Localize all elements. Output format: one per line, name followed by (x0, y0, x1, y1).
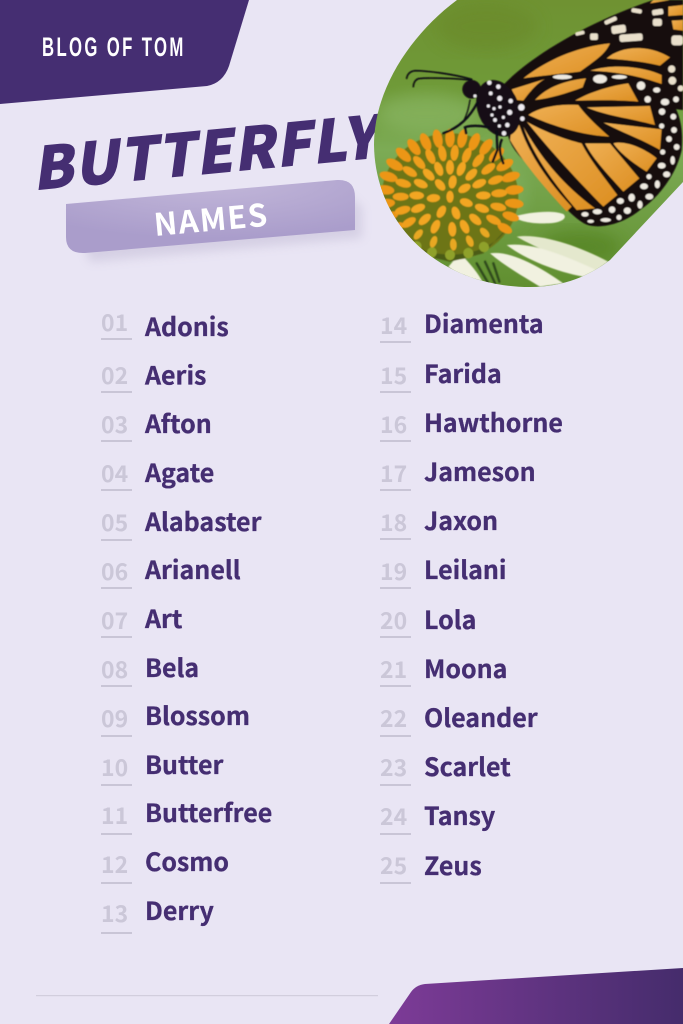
item 07: 07 (101, 602, 128, 636)
item 17: 17 (380, 455, 407, 489)
item 03: 03 (101, 406, 128, 440)
item 15: 15 (380, 357, 407, 391)
item 23: Scarlet (424, 748, 511, 784)
item 10: Butter (145, 746, 223, 782)
flower stem shadow (477, 262, 499, 283)
flower cone (375, 129, 524, 262)
item 13: 13 (101, 895, 128, 929)
item 10 (101, 746, 223, 786)
item 22: Oleander (424, 699, 538, 735)
item 12 (101, 843, 229, 884)
item 24 (380, 797, 496, 835)
item 18: 18 (380, 504, 407, 538)
item 25: Zeus (424, 847, 482, 883)
item 02: Aeris (144, 356, 206, 392)
item 23 (380, 748, 511, 786)
item 24: Tansy (424, 797, 496, 833)
list column 1 (101, 304, 272, 934)
item 17: Jameson (424, 453, 536, 489)
item 01 (101, 304, 229, 344)
item 05 (101, 503, 262, 541)
item 12: 12 (101, 846, 128, 880)
item 17 (380, 453, 536, 491)
item 06 (101, 551, 241, 589)
item 24: 24 (380, 798, 407, 832)
item 14 (380, 305, 544, 343)
item 04: 04 (101, 455, 128, 489)
item 11 (101, 794, 272, 835)
butterfly hindwing (507, 72, 682, 226)
title: butterfly: BUTTERFLY (32, 89, 389, 207)
item 07: Art (144, 600, 183, 636)
item 08: 08 (101, 651, 128, 685)
item 04 (101, 454, 214, 491)
item 20: Lola (424, 601, 476, 637)
butterfly forewing (503, 0, 683, 110)
footer banner (389, 968, 683, 1024)
item 25: 25 (380, 847, 407, 881)
item 23: 23 (380, 749, 407, 783)
item 08 (101, 649, 199, 687)
item 12: Cosmo (145, 843, 229, 879)
item 14: Diamenta (424, 305, 544, 341)
item 05: 05 (101, 504, 128, 538)
item 18: Jaxon (424, 502, 498, 538)
item 02: 02 (101, 357, 128, 391)
item 25 (380, 847, 482, 884)
item 07 (101, 600, 183, 638)
white petals (448, 212, 608, 287)
brand name: BLOG OF TOM (42, 32, 186, 62)
item 18 (380, 502, 498, 540)
item 16: 16 (380, 406, 407, 440)
item 03 (101, 405, 212, 442)
item 09: 09 (101, 700, 128, 734)
item 22: 22 (380, 700, 407, 734)
item 15 (380, 355, 502, 393)
item 10: 10 (101, 749, 128, 783)
subtitle pill: names (66, 180, 362, 262)
subtitle text: NAMES (152, 190, 270, 245)
butterfly body (462, 73, 528, 143)
item 02 (101, 356, 206, 393)
item 01: 01 (101, 304, 128, 338)
item 13: Derry (145, 892, 215, 928)
item 19: Leilani (424, 551, 506, 587)
item 21 (380, 650, 507, 687)
item 09 (101, 697, 250, 737)
item 06: Arianell (144, 551, 241, 587)
item 03: Afton (144, 405, 212, 441)
item 19 (380, 551, 506, 589)
item 09: Blossom (145, 697, 250, 733)
item 08: Bela (145, 649, 199, 685)
item 14: 14 (380, 307, 407, 341)
footer rule (36, 995, 378, 996)
item 01: Adonis (144, 308, 229, 344)
item 21: Moona (424, 650, 507, 686)
item 11: 11 (101, 797, 128, 831)
item 22 (380, 699, 538, 737)
item 13 (101, 892, 215, 934)
item 20 (380, 601, 476, 638)
item 16: Hawthorne (424, 404, 563, 440)
photo: monarch butterfly on coneflower (360, 0, 683, 300)
item 15: Farida (424, 355, 502, 391)
item 06: 06 (101, 553, 128, 587)
butterfly antennae and legs (407, 71, 503, 163)
item 04: Agate (144, 454, 214, 490)
item 11: Butterfree (145, 794, 272, 830)
list column 2 (380, 305, 563, 884)
item 19: 19 (380, 553, 407, 587)
item 20: 20 (380, 602, 407, 636)
header banner (0, 0, 249, 104)
item 21: 21 (380, 651, 407, 685)
item 05: Alabaster (144, 503, 262, 539)
